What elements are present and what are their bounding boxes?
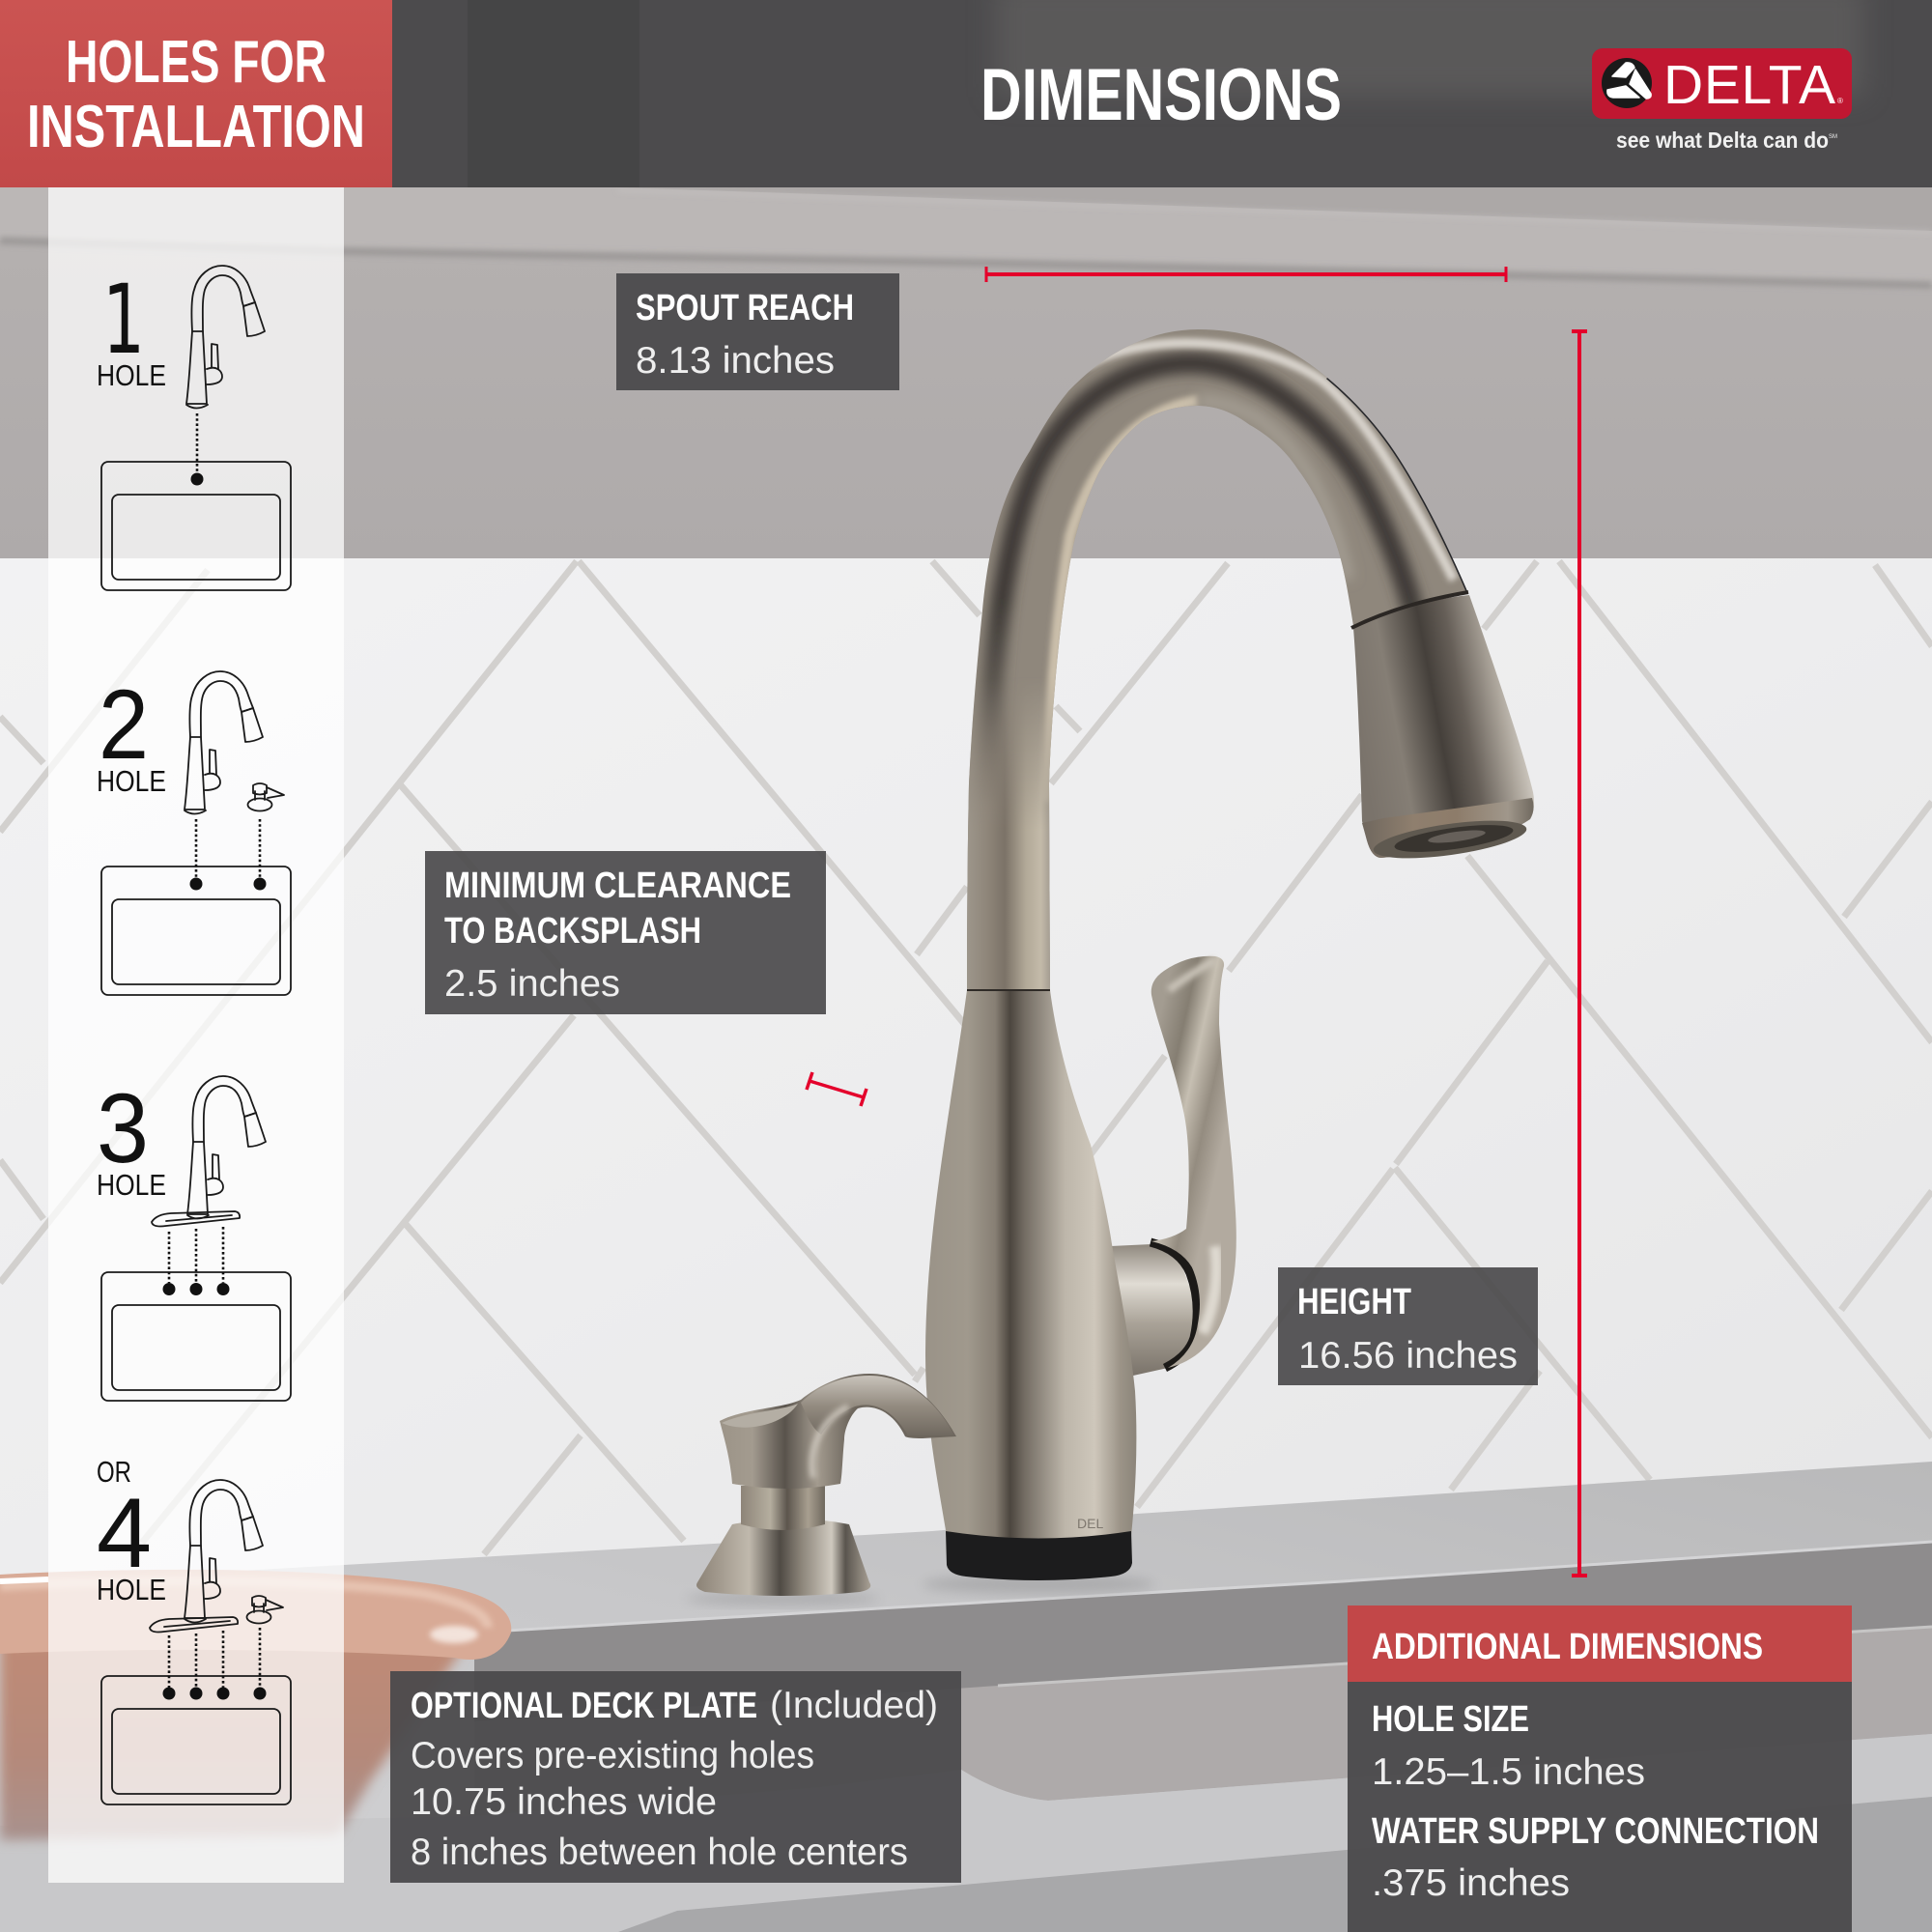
callout: minimum clearance: TO BACKSPLASH (444, 911, 701, 952)
option: 2 hole: 2 (99, 669, 149, 780)
heading: holes for installation: HOLES FOR (66, 29, 327, 96)
option: 3 hole: 3 (97, 1073, 149, 1183)
delta logo (1592, 48, 1852, 153)
faucet body: DEL (1077, 1516, 1103, 1531)
option: 2 hole (97, 669, 291, 995)
option: 3 hole: HOLE (97, 1168, 166, 1202)
measure line: height (1572, 330, 1587, 1577)
panel: additional dimensions: WATER SUPPLY CONNECTION (1372, 1811, 1819, 1852)
callout: optional deck plate: 8 inches between hole centers (411, 1832, 908, 1873)
heading: holes for installation (0, 0, 392, 187)
soap dispenser (696, 1374, 956, 1596)
panel: additional dimensions: 1.25–1.5 inches (1372, 1751, 1645, 1793)
panel: additional dimensions (1348, 1605, 1852, 1932)
callout: spout reach: SPOUT REACH (636, 288, 854, 328)
callout: spout reach: 8.13 inches (636, 340, 835, 382)
callout: height: 16.56 inches (1298, 1335, 1518, 1377)
heading: dimensions: DIMENSIONS (980, 54, 1342, 136)
option: 1 hole: 1 (102, 265, 145, 376)
option: or 4 hole: OR (97, 1455, 131, 1489)
faucet handle (1111, 956, 1236, 1376)
option: 3 hole (97, 1073, 291, 1401)
callout: height (1278, 1267, 1538, 1385)
heading: holes for installation: INSTALLATION (27, 94, 365, 160)
callout: optional deck plate (390, 1671, 961, 1883)
callout: spout reach (616, 273, 899, 390)
callout: minimum clearance: MINIMUM CLEARANCE (444, 866, 791, 906)
option: or 4 hole: HOLE (97, 1573, 166, 1606)
callout: height: HEIGHT (1297, 1282, 1411, 1322)
option: or 4 hole (97, 1455, 291, 1804)
faucet body (925, 990, 1136, 1580)
option: 1 hole: HOLE (97, 358, 166, 392)
panel: additional dimensions: .375 inches (1372, 1862, 1570, 1904)
panel: holes for installation (48, 187, 344, 1883)
option: or 4 hole: 4 (97, 1478, 152, 1588)
delta logo: DELTA (1663, 54, 1835, 116)
terracotta bowl (0, 1570, 511, 1840)
option: 2 hole: HOLE (97, 764, 166, 798)
callout: optional deck plate: (Included) (770, 1685, 938, 1726)
faucet spout (956, 319, 1478, 995)
callout: optional deck plate: OPTIONAL DECK PLATE (411, 1686, 757, 1726)
option: 1 hole (97, 265, 291, 590)
delta logo: see what Delta can do (1616, 128, 1829, 153)
callout: optional deck plate: 10.75 inches wide (411, 1781, 717, 1823)
panel: additional dimensions: ADDITIONAL DIMENSIONS (1372, 1627, 1763, 1667)
callout: minimum clearance (425, 851, 826, 1014)
panel: additional dimensions: HOLE SIZE (1372, 1699, 1529, 1740)
measure line: backsplash clearance (807, 1072, 867, 1106)
callout: optional deck plate: Covers pre-existing holes (411, 1735, 814, 1776)
delta logo: ® (1837, 97, 1843, 105)
header bar (392, 0, 1932, 187)
faucet photo (696, 319, 1534, 1596)
callout: minimum clearance: 2.5 inches (444, 963, 620, 1005)
faucet spray head (1351, 592, 1534, 866)
delta logo: SM (1829, 134, 1837, 140)
measure line: spout reach (986, 267, 1506, 282)
